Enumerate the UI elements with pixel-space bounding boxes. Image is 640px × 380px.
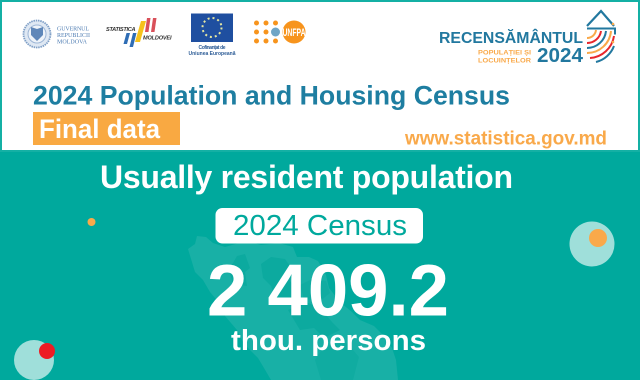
- logo: European Union: Uniunea Europeană: [188, 51, 236, 57]
- census label pill: 2024 Census: [233, 210, 407, 242]
- header panel: [1, 1, 639, 151]
- population value: 2 409.2: [207, 250, 449, 332]
- logo: Census 2024: RECENSĂMÂNTUL: [439, 29, 583, 47]
- unit: thou. persons: [231, 325, 426, 357]
- heading: usually resident population: Usually resident population: [100, 159, 513, 195]
- logo: Government of Moldova: [24, 20, 90, 48]
- map districts: [229, 254, 250, 286]
- main title: 2024 Population and Housing Census: [33, 80, 510, 110]
- final data badge: Final data: [39, 114, 160, 144]
- decorative circle left with red dot: [14, 340, 55, 380]
- logo: Statistica Moldovei: [106, 18, 172, 47]
- decorative circle right with orange dot: [570, 222, 614, 266]
- logo: Government of Moldova: GUVERNUL: [57, 26, 89, 32]
- logo: Census 2024: LOCUINȚELOR: [478, 58, 531, 64]
- logo: Statistica Moldovei: STATISTICA: [106, 27, 136, 33]
- logo: Census 2024: [439, 11, 615, 67]
- logo: European Union: [188, 14, 236, 57]
- logo: Government of Moldova: REPUBLICII: [57, 33, 90, 39]
- logo: European Union: Cofinanțat de: [198, 45, 226, 51]
- logo: Census 2024: POPULAȚIEI ȘI: [478, 50, 531, 56]
- logo: Statistica Moldovei: MOLDOVEI: [143, 36, 172, 42]
- small orange dot: [88, 218, 96, 226]
- map of Moldova watermark: [188, 236, 398, 380]
- logo: UNFPA: UNFPA: [282, 27, 306, 39]
- website: www.statistica.gov.md: [404, 128, 607, 150]
- house and drop icon: [587, 11, 615, 62]
- logo: Census 2024: 2024: [537, 45, 584, 67]
- logo: Government of Moldova: MOLDOVA: [57, 40, 88, 46]
- logo: UNFPA: [254, 20, 306, 44]
